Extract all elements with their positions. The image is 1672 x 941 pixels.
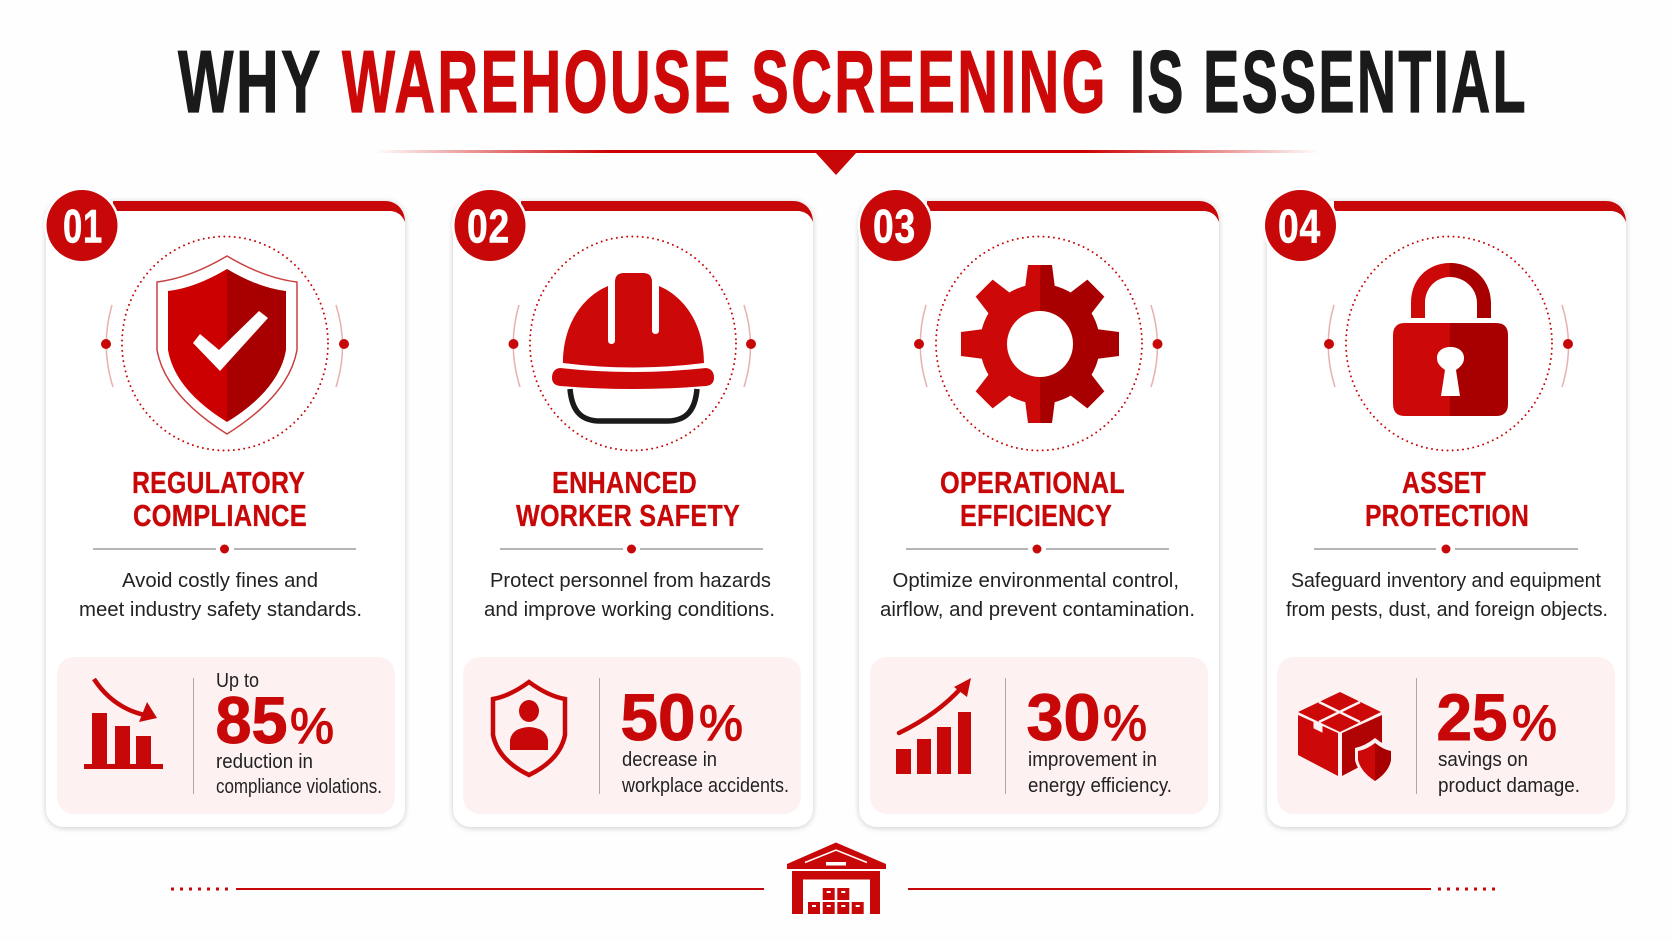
stat text: reduction in [216,751,313,773]
stat text: % [290,698,334,754]
icon ring [914,236,1162,450]
heading: EFFICIENCY [960,499,1112,533]
description: and improve working conditions. [484,598,775,621]
stat text [216,670,382,798]
icon: shield with check [157,256,297,434]
heading [940,466,1125,533]
stat text: 30 [1026,680,1100,754]
stat panel [57,657,395,814]
title: WAREHOUSE SCREENING [342,32,1108,131]
description [1286,569,1608,621]
number badge 04 [1262,188,1338,264]
number badge 02 [452,188,528,264]
description: Avoid costly fines and [122,569,318,592]
description: Optimize environmental control, [892,569,1179,592]
icon ring [101,236,349,450]
number badge 03 [858,188,934,264]
heading: WORKER SAFETY [516,499,740,533]
heading: COMPLIANCE [133,499,307,533]
number badge 04: 04 [1278,200,1321,252]
stat text: product damage. [1438,775,1580,797]
heading: ASSET [1402,466,1486,500]
heading [516,466,740,533]
icon: warehouse [787,842,886,914]
icon ring [508,236,756,450]
description: meet industry safety standards. [79,598,362,621]
heading [1365,466,1529,533]
title: WHY [178,32,323,131]
icon: hard hat [552,273,714,421]
title underline with pointer [375,150,1319,175]
footer rule right [908,888,1499,890]
description [79,569,362,621]
divider [500,544,763,554]
stat text [1026,680,1172,797]
icon: shield with person [493,682,565,775]
stat text [1436,680,1580,797]
stat text: savings on [1438,749,1528,771]
stat text: 50 [620,680,696,754]
footer rule left [171,888,764,890]
description: from pests, dust, and foreign objects. [1286,598,1608,621]
stat text: % [1512,695,1557,751]
icon ring [1324,236,1573,450]
stat text: improvement in [1028,749,1157,771]
heading: ENHANCED [552,466,697,500]
stat text: compliance violations. [216,776,382,798]
divider [906,544,1169,554]
stat text: workplace accidents. [621,775,789,797]
panel: regulatory compliance [44,188,405,827]
heading: OPERATIONAL [940,466,1125,500]
description [880,569,1195,621]
stat panel [1277,657,1615,814]
stat text: % [699,695,743,751]
icon: box with shield [1298,692,1393,784]
icon: falling bar chart [84,679,163,769]
stat text: Up to [216,670,259,692]
stat text: energy efficiency. [1028,775,1172,797]
icon: padlock [1393,263,1508,416]
stat panel [870,657,1208,814]
panel: operational efficiency [858,188,1219,827]
heading [132,466,307,533]
stat text [620,680,789,797]
panel: asset protection [1262,188,1626,827]
heading: PROTECTION [1365,499,1529,533]
description [484,569,775,621]
stat text: % [1103,695,1147,751]
divider [1314,544,1578,554]
divider [93,544,356,554]
description: airflow, and prevent contamination. [880,598,1195,621]
description: Protect personnel from hazards [490,569,771,592]
stat text: 25 [1436,680,1508,754]
icon: gear [961,265,1119,423]
stat text: 85 [216,683,288,757]
stat text: decrease in [622,749,717,771]
number badge 01 [44,188,120,264]
panel: enhanced worker safety [452,188,813,827]
number badge 02: 02 [467,200,510,252]
description: Safeguard inventory and equipment [1291,569,1601,592]
stat panel [463,657,801,814]
number badge 03: 03 [873,200,916,252]
heading: REGULATORY [132,466,305,500]
icon: rising bar chart [896,678,971,774]
number badge 01: 01 [63,200,103,252]
